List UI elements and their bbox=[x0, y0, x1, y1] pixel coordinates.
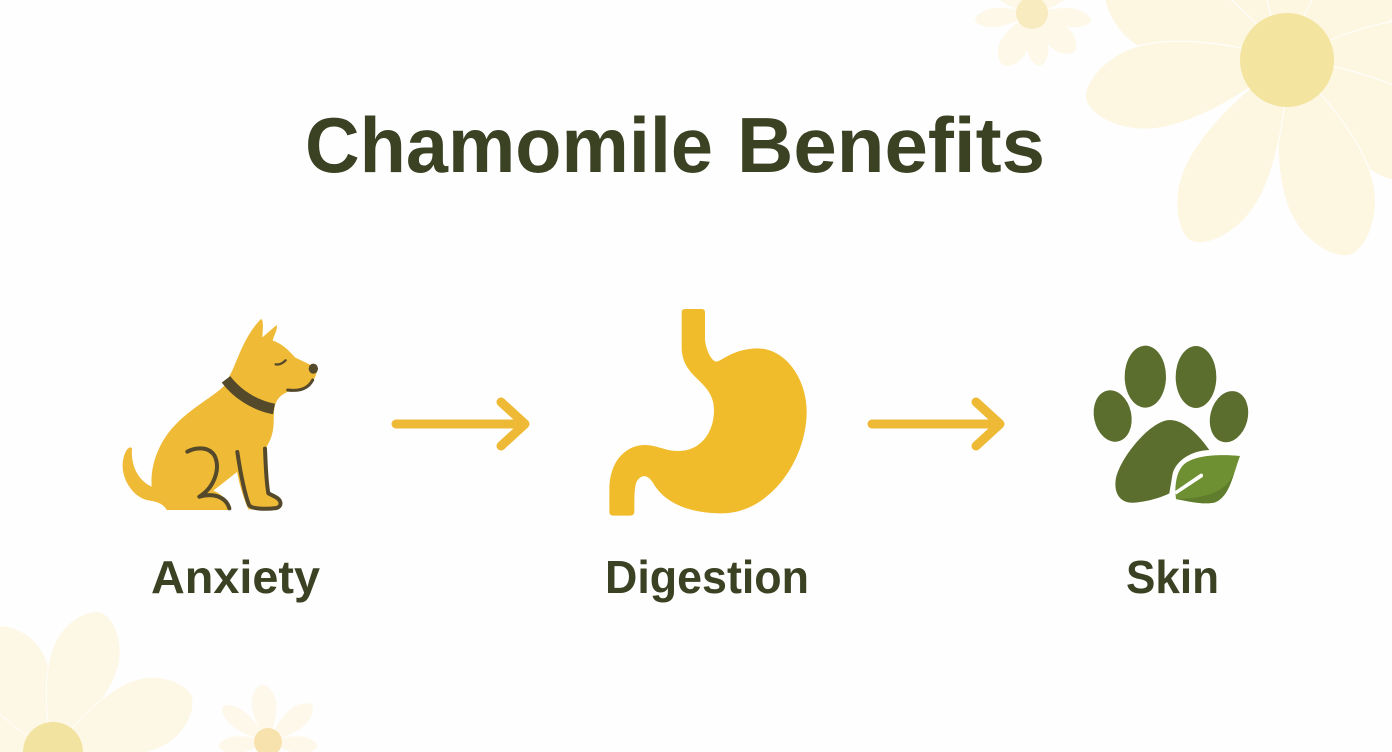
icon: stomach bbox=[609, 309, 807, 516]
flower: large top right bbox=[1078, 0, 1392, 269]
arrow: digestion to skin bbox=[872, 402, 1000, 446]
flower: small top right bbox=[974, 0, 1092, 72]
title bbox=[305, 101, 1045, 189]
icon: paw with leaf bbox=[1089, 346, 1254, 503]
arrow: anxiety to digestion bbox=[396, 402, 525, 446]
flower: large bottom left bbox=[0, 601, 205, 752]
label: skin: Skin bbox=[1126, 551, 1219, 603]
label: digestion: Digestion bbox=[605, 551, 809, 603]
icon: sitting dog bbox=[123, 319, 318, 511]
title: Chamomile bbox=[305, 101, 713, 189]
flower: small bottom left bbox=[217, 684, 319, 752]
label: anxiety: Anxiety bbox=[151, 551, 320, 603]
title: Benefits bbox=[737, 101, 1045, 189]
